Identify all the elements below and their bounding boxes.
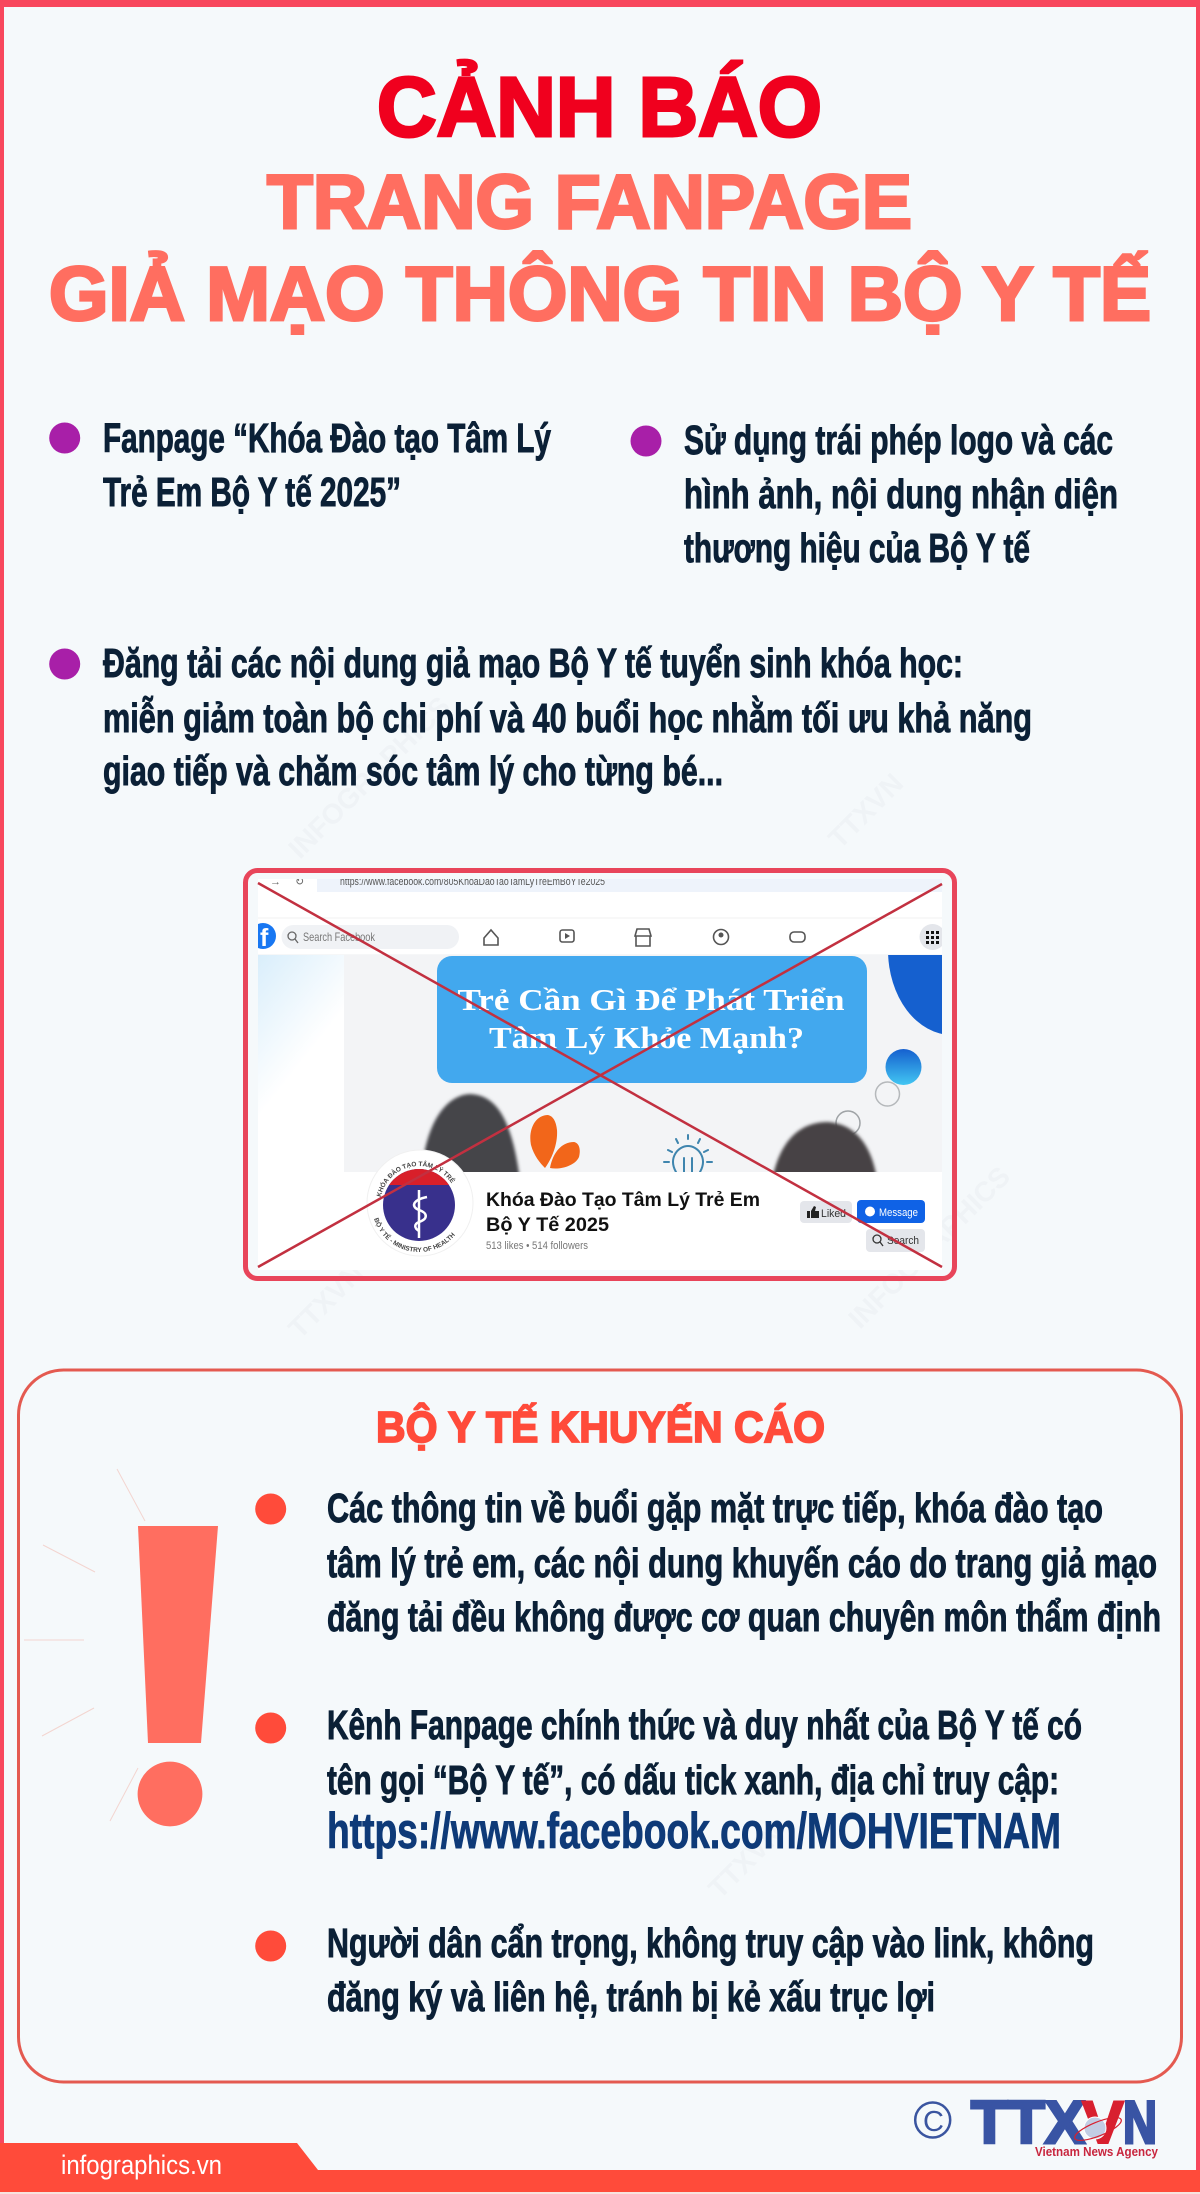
bullet: illegal logo use: thương hiệu của Bộ Y tế	[684, 525, 1030, 571]
fake fanpage screenshot	[243, 868, 957, 1281]
panel: ministry recommendation	[18, 1370, 1182, 2082]
bullet: fanpage name: Trẻ Em Bộ Y tế 2025”	[103, 469, 401, 515]
TTXVN logo: TTX	[971, 2089, 1085, 2156]
page name and stats	[486, 1189, 760, 1252]
title	[49, 60, 1151, 337]
screenshot frame	[246, 870, 954, 1278]
footer site name: infographics.vn	[61, 2150, 222, 2180]
ministry logo: BỘ Y TẾ - MINISTRY OF HEALTH	[374, 1218, 455, 1252]
cover image	[258, 955, 942, 1172]
recommendation 2	[255, 1702, 1082, 1859]
title: CẢNH BÁO	[377, 60, 822, 154]
browser address bar	[272, 879, 942, 892]
page action buttons: Search	[887, 1235, 919, 1247]
screenshot background	[258, 879, 942, 1270]
facebook navigation bar: Search Facebook	[303, 930, 376, 944]
ministry logo	[366, 1150, 474, 1256]
title: TRANG FANPAGE	[267, 160, 912, 245]
page action buttons: Liked	[821, 1208, 846, 1220]
TTXVN logo	[915, 2089, 1159, 2159]
browser address bar: https://www.facebook.com/805KhoaDaoTaoTamLyTreEmBoYTe2025	[340, 876, 605, 888]
recommendation 3	[255, 1920, 1094, 2020]
text: TTXVN	[702, 1817, 789, 1904]
browser address bar: →	[270, 876, 281, 888]
icon: exclamation mark	[24, 1469, 218, 1826]
cover decoration circles	[888, 955, 942, 1034]
page action buttons: Message	[879, 1207, 918, 1219]
page name and stats: Bộ Y Tế 2025	[486, 1214, 609, 1236]
facebook navigation bar: f	[260, 924, 269, 952]
orange heart	[530, 1115, 580, 1169]
browser address bar: ↻	[295, 876, 304, 888]
text: TTXVN	[822, 767, 909, 854]
page name and stats: 513 likes • 514 followers	[486, 1240, 588, 1252]
facebook navigation bar	[250, 918, 946, 955]
cover headline box	[437, 956, 867, 1083]
child hair right	[772, 1122, 877, 1180]
TTXVN logo: V	[1082, 2089, 1124, 2156]
bulb icon	[664, 1135, 712, 1172]
bullet: fake course content	[49, 640, 1032, 794]
page name and stats: Khóa Đào Tạo Tâm Lý Trẻ Em	[486, 1189, 760, 1211]
bullet: illegal logo use	[630, 417, 1118, 571]
ministry logo: KHÓA ĐÀO TẠO TÂM LÝ TRẺ	[376, 1160, 456, 1197]
panel heading: BỘ Y TẾ KHUYẾN CÁO	[376, 1401, 825, 1452]
TTXVN logo: N	[1123, 2089, 1157, 2156]
title: GIẢ MẠO THÔNG TIN BỘ Y TẾ	[49, 252, 1151, 337]
TTXVN logo: Vietnam News Agency	[1035, 2144, 1159, 2159]
copyright symbol: C	[923, 2106, 944, 2138]
text: TTXVN	[282, 1257, 369, 1344]
bullet: fanpage name: Fanpage “Khóa Đào tạo Tâm Lý	[103, 415, 551, 461]
cover headline box: Trẻ Cần Gì Để Phát Triển	[458, 982, 844, 1017]
bullet: fake course content: giao tiếp và chăm sóc tâm lý cho từng bé...	[103, 748, 723, 794]
child hair left	[421, 1094, 520, 1180]
red X cross	[258, 883, 942, 1267]
footer bar	[0, 2143, 1200, 2194]
recommendation 3: đăng ký và liên hệ, tránh bị kẻ xấu trục lợi	[327, 1974, 935, 2020]
page action buttons	[800, 1200, 925, 1252]
panel outline	[18, 1370, 1182, 2082]
text: INFOGRAPHICS	[282, 691, 456, 864]
bullet: fanpage name	[49, 415, 551, 515]
text: INFOGRAPHICS	[842, 1161, 1016, 1334]
recommendation 1	[255, 1485, 1161, 1640]
copyright symbol	[915, 2102, 950, 2138]
cover headline box: Tâm Lý Khỏe Mạnh?	[489, 1020, 804, 1055]
